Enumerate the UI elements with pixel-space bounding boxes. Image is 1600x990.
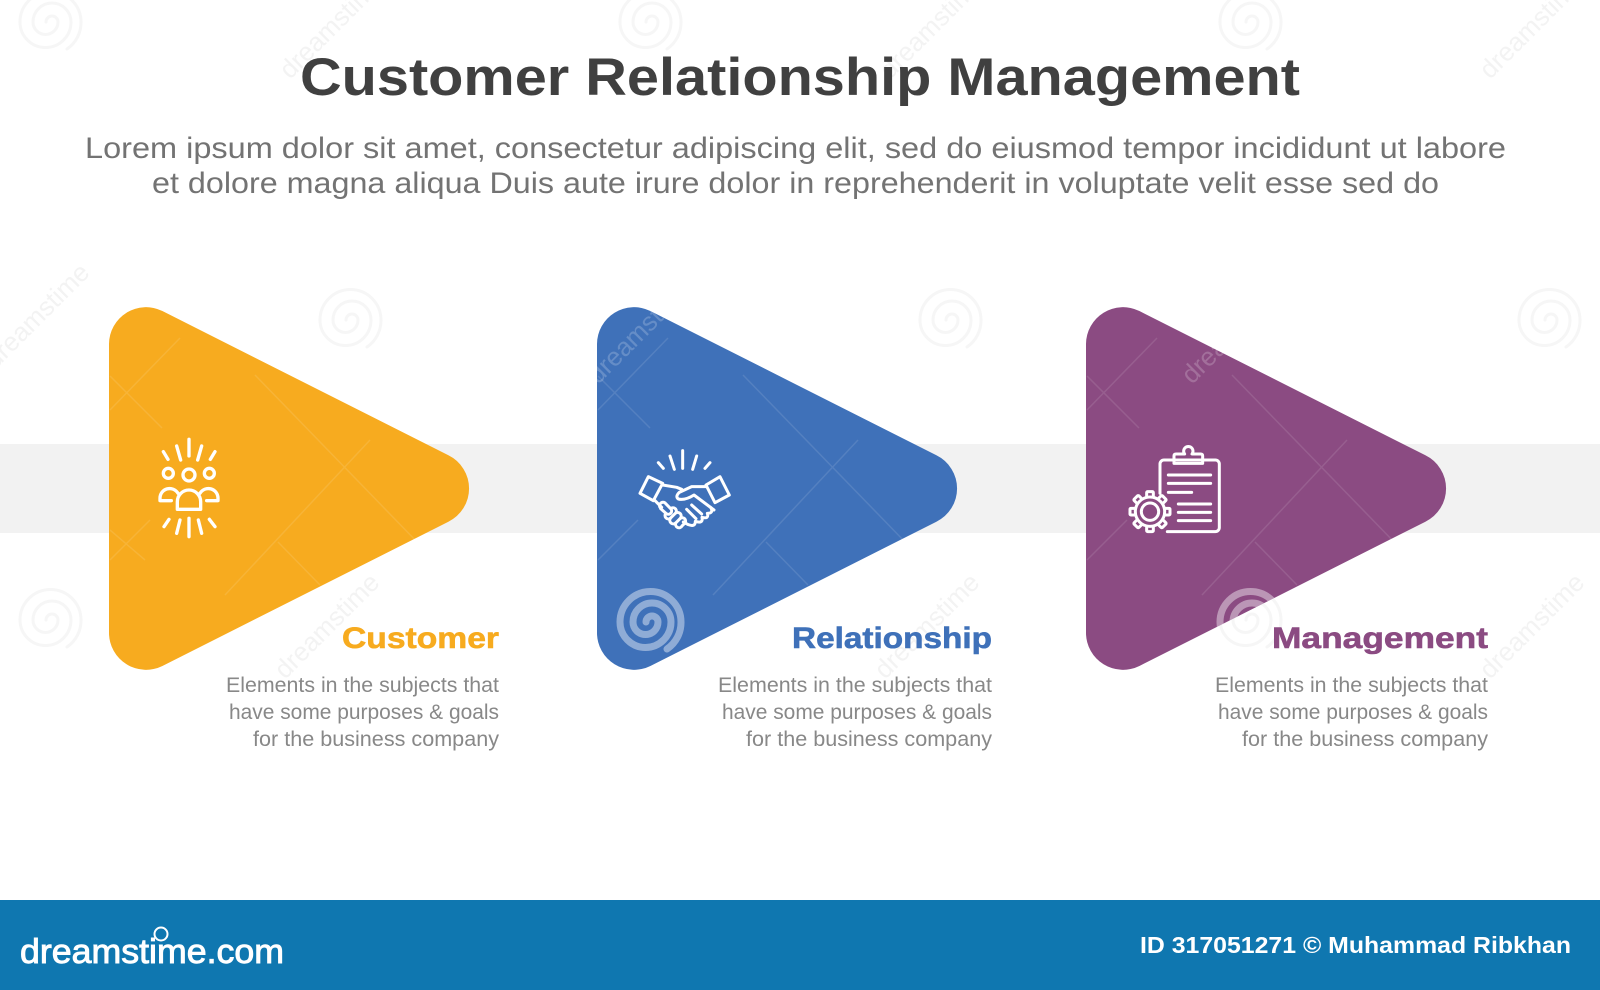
text: management: have some purposes & goals: [1218, 701, 1488, 724]
watermark lines: management: [1087, 338, 1397, 595]
panel: management: [1086, 272, 1489, 751]
heading: relationship: Relationship: [792, 622, 992, 655]
text: management: [1215, 674, 1489, 751]
text: customer: Elements in the subjects that: [226, 674, 499, 697]
watermark spirals: [20, 0, 1580, 647]
text: customer: have some purposes & goals: [229, 701, 499, 724]
heading: management: Management: [1272, 622, 1488, 655]
triangle: relationship: [597, 307, 957, 670]
watermark text on purple: dreamstime: [1175, 272, 1292, 389]
text: relationship: Elements in the subjects that: [718, 674, 992, 697]
footer logo: dreamstime.com: [20, 933, 284, 971]
title: Customer Relationship Management: [300, 48, 1300, 107]
watermark text: dreamstime: [1473, 567, 1590, 684]
triangle: customer: [109, 307, 469, 670]
icon: clipboard and gear: [1130, 446, 1219, 532]
watermark text: dreamstime: [268, 567, 385, 684]
icon: handshake: [640, 451, 729, 528]
subtitle: [85, 132, 1506, 200]
text: management: for the business company: [1242, 728, 1489, 751]
triangle: management: [1086, 307, 1446, 670]
subtitle: et dolore magna aliqua Duis aute irure dolor in reprehenderit in voluptate velit esse sed do: [152, 167, 1439, 200]
watermark text: [0, 0, 1590, 684]
subtitle: Lorem ipsum dolor sit amet, consectetur adipiscing elit, sed do eiusmod tempor incididunt ut labore: [85, 132, 1506, 165]
watermark spiral on purple: [1216, 588, 1274, 627]
text: customer: [226, 674, 500, 751]
text: management: Elements in the subjects that: [1215, 674, 1488, 697]
panel: relationship: [597, 307, 992, 750]
text: customer: for the business company: [253, 728, 500, 751]
footer bar: [0, 900, 1600, 990]
footer credit: ID 317051271 © Muhammad Ribkhan: [1140, 932, 1571, 958]
watermark text on blue: dreamstime: [581, 272, 698, 389]
icon: people: [160, 439, 218, 537]
watermark lines: relationship: [598, 338, 908, 595]
background band: [0, 444, 1600, 533]
heading: customer: Customer: [342, 622, 499, 655]
text: relationship: for the business company: [746, 728, 993, 751]
watermark text: dreamstime: [868, 567, 985, 684]
watermark spiral on blue: [620, 592, 681, 649]
text: relationship: [718, 674, 993, 751]
text: relationship: have some purposes & goals: [722, 701, 992, 724]
panel: customer: [109, 307, 500, 751]
watermark lines: customer: [110, 338, 420, 595]
